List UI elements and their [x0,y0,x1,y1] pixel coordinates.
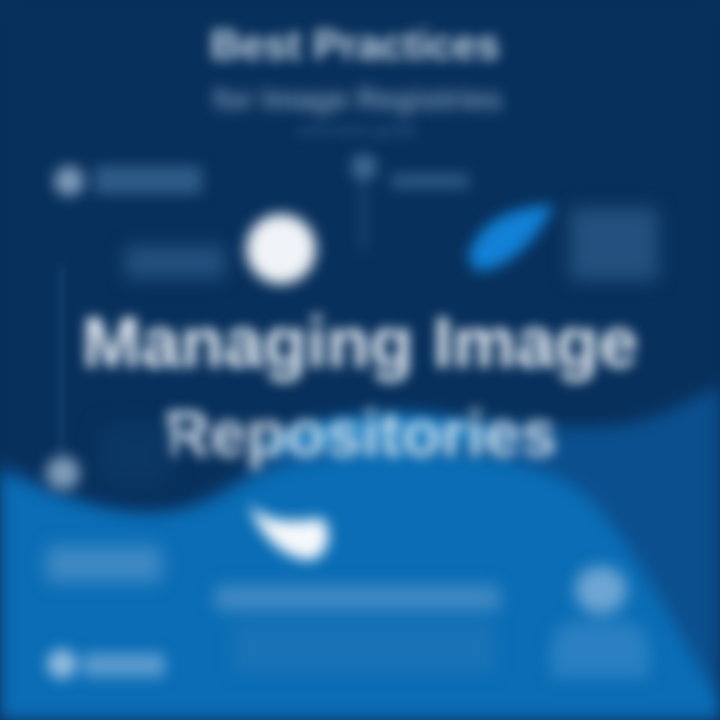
title: best practices: Best Practices [210,21,500,68]
small caption: overview guide [297,120,418,140]
icon: bottom left dot [47,649,77,679]
panel heading [215,585,500,611]
connector icon [351,154,377,180]
heading line 2: Repositories [163,397,557,470]
bottom left label one [46,546,162,582]
center connector icon and label [346,148,472,241]
icon: blue leaf [460,196,560,280]
subtitle: for Image Registries [213,83,502,116]
left vertical line [60,265,63,455]
icon: top left dot [54,166,84,196]
connector label [391,174,469,188]
panel body [233,623,495,673]
heading line 1: Managing Image [82,304,638,383]
label text [83,653,165,677]
icon: white swoosh [242,499,340,571]
icon: person [546,556,654,683]
icon: lower left dot [46,456,80,490]
person body [551,622,649,678]
person head [575,566,627,614]
center bottom panel [208,578,507,672]
label: top left [94,166,202,194]
left small label [125,246,225,278]
lower left dark label [100,425,170,485]
bottom left label two [38,640,172,688]
main heading [76,304,644,478]
right text block [570,208,658,280]
icon: white circle [246,214,316,284]
top left icon and label [46,158,208,204]
